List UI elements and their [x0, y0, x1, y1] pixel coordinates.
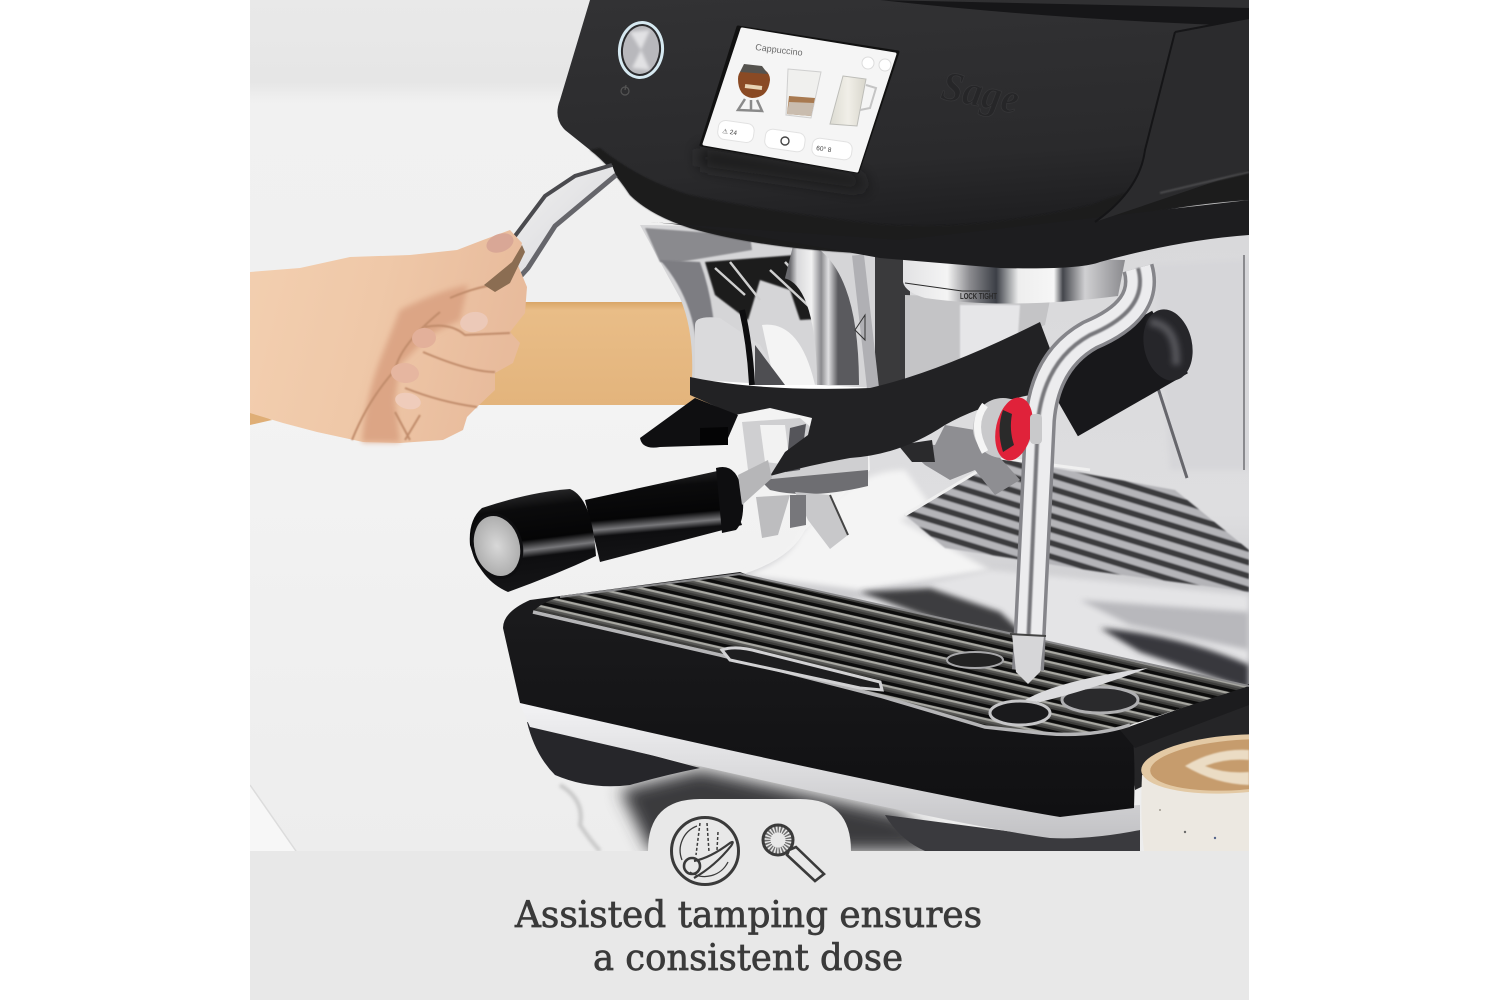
steam wand	[1010, 268, 1140, 684]
chrome spout housing	[640, 225, 875, 388]
wooden counter edge behind hand	[250, 413, 272, 425]
palm shading	[362, 285, 468, 442]
finger creases	[352, 283, 510, 440]
icon: portafilter	[763, 825, 824, 881]
drip tray: grate	[533, 574, 1249, 734]
icon: power symbol	[621, 85, 629, 95]
drip tray: feet	[527, 722, 1140, 851]
touchscreen	[701, 27, 898, 172]
steam lever handle	[514, 163, 618, 278]
icon: assisted tamping dial	[672, 818, 738, 884]
portafilter basket	[742, 418, 868, 494]
drip tray: side panel	[1130, 700, 1249, 790]
black silicone tamping collar and lever	[640, 322, 1058, 476]
drip tray: black front	[503, 572, 1134, 817]
red steam knob	[973, 394, 1042, 464]
lever tip between fingers	[484, 245, 525, 292]
background: wall, wooden shelf and marble counter	[250, 0, 1249, 851]
screen title: Cappuccino	[755, 42, 803, 58]
chrome panel under collar	[905, 295, 1050, 380]
drip tray: chrome band	[528, 722, 1140, 838]
rear wing nut reflection	[898, 425, 1020, 495]
chrome group collar with LOCK TIGHT mark: LOCK TIGHT	[960, 291, 998, 301]
caption line 2: a consistent dose	[593, 938, 903, 979]
portafilter handle	[465, 460, 772, 592]
stainless backsplash with reflections	[740, 235, 1249, 700]
caption panel	[250, 799, 1249, 1000]
screen pill icon centre	[781, 137, 789, 145]
screen pill labels: ⚠ 24	[722, 127, 738, 137]
icon: power button with steel dial	[618, 21, 664, 79]
Sage logo embossed: Sage	[938, 63, 1023, 123]
boiler pipe	[1060, 305, 1199, 405]
icon tab	[648, 799, 851, 851]
screen icon: grinder	[738, 64, 770, 111]
drip tray: right lip	[1120, 684, 1249, 748]
machine head, matte black	[557, 0, 1249, 268]
screen pills	[717, 120, 853, 161]
dark column behind group head	[875, 257, 910, 386]
screen top right buttons	[862, 57, 891, 71]
chrome group collar with LOCK TIGHT mark	[903, 256, 1125, 304]
caption text	[514, 895, 982, 979]
caption line 1: Assisted tamping ensures	[514, 895, 982, 936]
portafilter wing nuts	[756, 492, 848, 549]
hand gripping lever	[250, 230, 527, 443]
shadow under machine	[620, 770, 950, 851]
screen icon: latte glass	[786, 69, 821, 118]
drain hole	[990, 701, 1050, 725]
photo: espresso machine with hand on tamping lever	[250, 0, 1333, 851]
grate drain slot	[722, 648, 882, 690]
chrome reflection under collar	[960, 305, 1020, 360]
rear drain hole	[947, 652, 1003, 668]
screen pill labels right: 60° 8	[816, 144, 832, 154]
screen icon: milk jug	[830, 76, 876, 126]
fingernails	[390, 230, 516, 412]
steel pin wedge	[1025, 668, 1148, 702]
flow nozzle knob	[1062, 687, 1138, 713]
coffee cup with latte art	[1139, 728, 1333, 851]
infographic canvas	[250, 0, 1249, 1000]
